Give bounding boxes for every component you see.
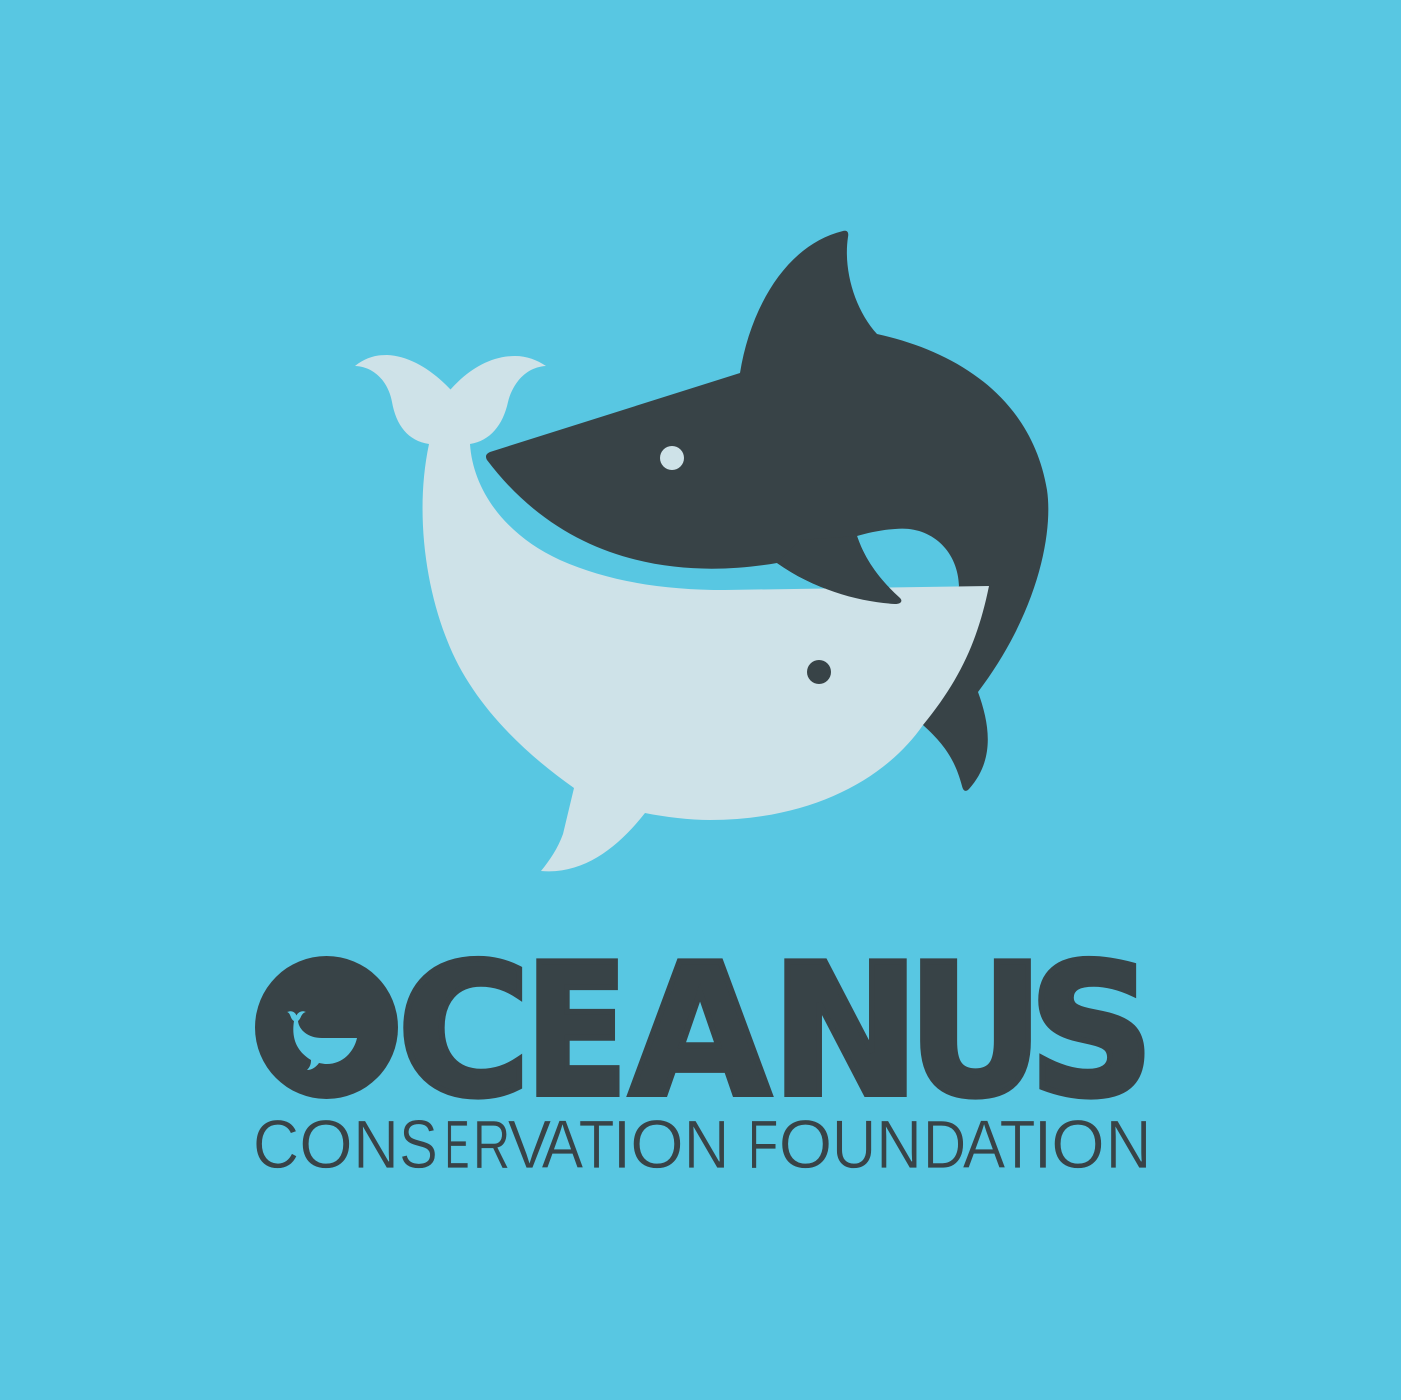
subtitle: CONSERVATION FOUNDATION: N [1106, 1107, 1151, 1184]
subtitle: CONSERVATION FOUNDATION: U [832, 1106, 876, 1183]
shark body [486, 231, 1048, 791]
wordmark: OCEANUS [255, 925, 1154, 1138]
whale body [355, 355, 989, 871]
wordmark: OCEANUS: U [908, 926, 1043, 1138]
subtitle: CONSERVATION FOUNDATION: A [542, 1105, 583, 1183]
subtitle: CONSERVATION FOUNDATION: N [876, 1107, 922, 1184]
O emblem: circle with whale [255, 956, 398, 1099]
wordmark: OCEANUS: N [771, 926, 920, 1137]
subtitle: CONSERVATION FOUNDATION: N [353, 1107, 399, 1184]
subtitle: CONSERVATION FOUNDATION: I [612, 1106, 632, 1183]
wordmark: OCEANUS: S [1029, 926, 1154, 1138]
shark eye [660, 446, 684, 470]
subtitle: CONSERVATION FOUNDATION: E [445, 1106, 469, 1183]
subtitle: CONSERVATION FOUNDATION: T [1000, 1106, 1035, 1183]
wordmark: OCEANUS: C [397, 925, 531, 1137]
subtitle: CONSERVATION FOUNDATION [253, 1105, 1151, 1184]
subtitle: CONSERVATION FOUNDATION: N [684, 1107, 729, 1184]
subtitle: CONSERVATION FOUNDATION: A [963, 1107, 1006, 1184]
shark pectoral fin [777, 536, 901, 604]
wordmark: OCEANUS: E [525, 926, 628, 1138]
logo illustration: shark and whale [355, 231, 1048, 871]
subtitle: CONSERVATION FOUNDATION: O [779, 1106, 832, 1183]
wordmark: OCEANUS: O [272, 958, 381, 1106]
subtitle: CONSERVATION FOUNDATION: V [508, 1106, 551, 1183]
whale eye [807, 660, 831, 684]
subtitle: CONSERVATION FOUNDATION: F [748, 1105, 778, 1183]
wordmark: OCEANUS: A [630, 925, 770, 1137]
subtitle: CONSERVATION FOUNDATION: O [299, 1106, 353, 1183]
subtitle: CONSERVATION FOUNDATION: D [923, 1105, 966, 1183]
subtitle: CONSERVATION FOUNDATION: S [399, 1105, 438, 1183]
subtitle: CONSERVATION FOUNDATION: R [473, 1106, 510, 1183]
subtitle: CONSERVATION FOUNDATION: O [1051, 1106, 1105, 1183]
subtitle: CONSERVATION FOUNDATION: O [630, 1106, 684, 1183]
subtitle: CONSERVATION FOUNDATION: C [253, 1107, 299, 1184]
subtitle: CONSERVATION FOUNDATION: I [1033, 1106, 1053, 1183]
subtitle: CONSERVATION FOUNDATION: T [579, 1106, 614, 1183]
